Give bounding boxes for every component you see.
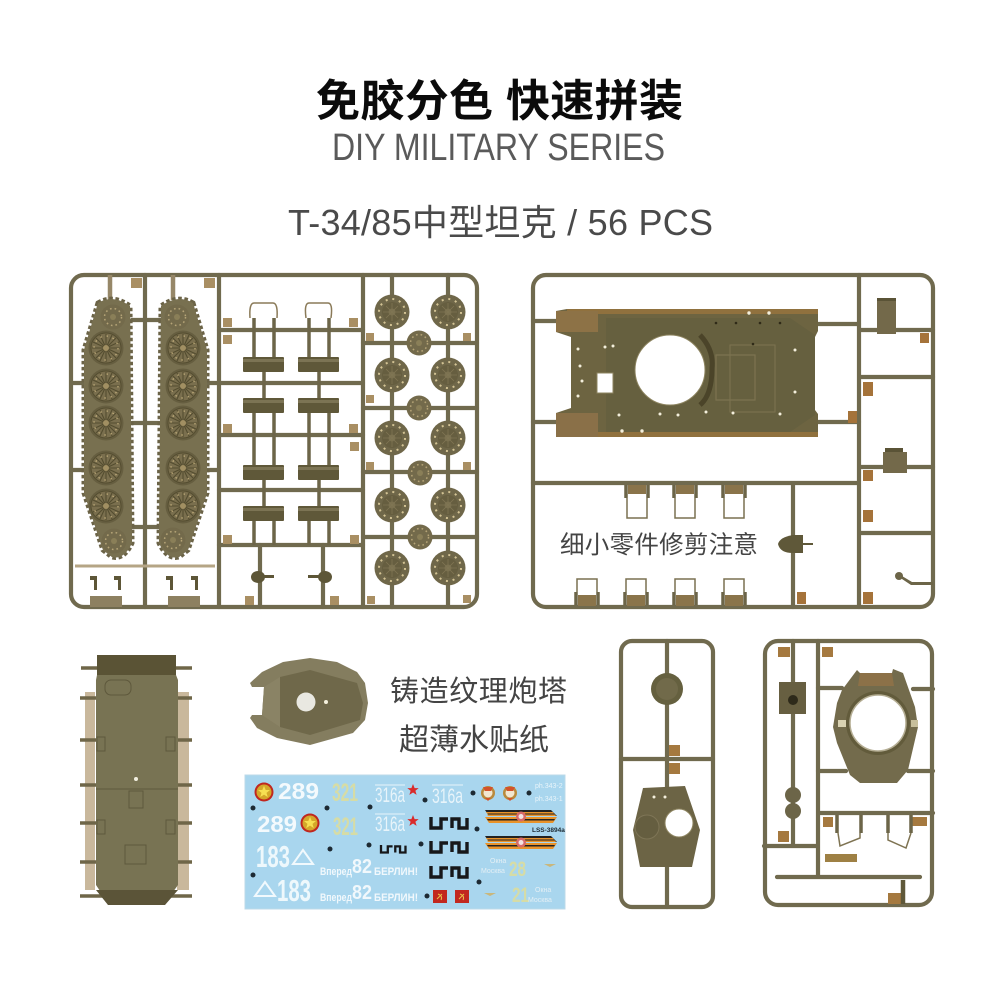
small labels: ph.343-1: [535, 796, 563, 803]
tan gates: [669, 745, 680, 774]
decal sheet: [245, 775, 565, 909]
small pin part: [895, 572, 933, 585]
pale script: Москва: [528, 897, 552, 904]
callout: cast texture turret: 铸造纹理炮塔: [390, 675, 567, 708]
side pins: [80, 668, 192, 896]
panel: turret top sprue: [621, 641, 713, 907]
red stars: [407, 784, 419, 826]
numbers 289: 289: [257, 811, 297, 837]
left track: [84, 299, 132, 557]
small labels: ph.343-2: [535, 783, 563, 790]
pale script: Окна: [535, 887, 551, 894]
slogans: Вперед: [320, 892, 352, 904]
subtitle: DIY MILITARY SERIES: [332, 127, 665, 169]
markings 316a: [375, 784, 463, 836]
markings 316a: 316а: [432, 785, 463, 808]
numbers 183: 183: [256, 839, 290, 874]
pale yellow markings: [484, 858, 556, 907]
triangles: [255, 850, 313, 896]
round hatch: [651, 673, 683, 705]
tan sprue gates: [131, 278, 471, 605]
turret underside: [250, 658, 368, 745]
pale yellow markings: 28: [509, 858, 526, 881]
numbers 321: 321: [333, 813, 358, 841]
slogans: БЕРЛИН!: [374, 866, 418, 878]
small turret fittings: [251, 571, 332, 583]
slogans: 82: [352, 856, 372, 878]
side strips: [85, 692, 189, 890]
slogans: БЕРЛИН!: [374, 892, 418, 904]
ribbons: [485, 810, 557, 849]
numbers 321: 321: [332, 779, 358, 807]
markings 316a: 316а: [375, 784, 405, 807]
sprue frame: [764, 641, 933, 905]
model heading: T-34/85中型坦克 / 56 PCS: [288, 202, 713, 243]
sprue frame: [533, 275, 933, 607]
title: 免胶分色 快速拼装: [316, 77, 683, 126]
hull plate: [96, 655, 178, 903]
black markings: [381, 817, 467, 877]
callout: trimming note: 细小零件修剪注意: [560, 531, 758, 559]
panel: hull top sprue: [533, 275, 933, 607]
turret top plate: [633, 786, 700, 867]
roundels: [254, 782, 320, 832]
pale script: [481, 858, 552, 904]
vertical pin: [901, 880, 905, 904]
hull bottom part: [80, 655, 192, 905]
lower clips: [576, 579, 745, 606]
hull rear: [96, 890, 178, 905]
tan sprue gates: [797, 333, 929, 604]
upper clips: [626, 485, 745, 518]
panel: turret ring sprue: [764, 641, 933, 905]
slogans: Вперед: [320, 866, 352, 878]
small parts under tracks: [90, 576, 200, 607]
sprue frame: [71, 275, 477, 607]
hull hole: [134, 777, 138, 781]
numbers 183: 183: [277, 873, 311, 908]
hull surface details: [96, 680, 178, 864]
markings 316a: 316а: [375, 813, 405, 836]
small ball parts: [785, 787, 801, 819]
numbers 183: [256, 839, 311, 908]
red flags: [433, 890, 469, 903]
numbered dots: [250, 790, 532, 898]
pale script: Москва: [481, 868, 505, 875]
turret ring part: [833, 669, 918, 783]
small labels: [532, 783, 565, 834]
clips: [837, 815, 911, 848]
callout: ultra-thin decal: 超薄水贴纸: [399, 724, 549, 757]
sprue frame: [621, 641, 713, 907]
track link parts: [877, 298, 907, 473]
road wheels: [374, 294, 466, 586]
slogans: [320, 856, 418, 904]
pale yellow markings: 21: [512, 884, 529, 907]
numbers 289: [257, 778, 319, 837]
numbers 289: 289: [278, 778, 319, 804]
numbers 321: [332, 779, 358, 841]
tan gates: [778, 647, 927, 904]
hull top part: [556, 309, 818, 437]
right track: [159, 299, 207, 557]
small square part: [779, 682, 806, 714]
badges: [481, 786, 517, 801]
panel: wheels and tracks sprue: [71, 275, 477, 607]
hull front: [97, 655, 176, 675]
suspension cylinders: [243, 303, 339, 545]
hatch part: [778, 535, 813, 553]
pale script: Окна: [490, 858, 506, 865]
slogans: 82: [352, 882, 372, 904]
small labels: LSS-3894a: [532, 827, 565, 834]
